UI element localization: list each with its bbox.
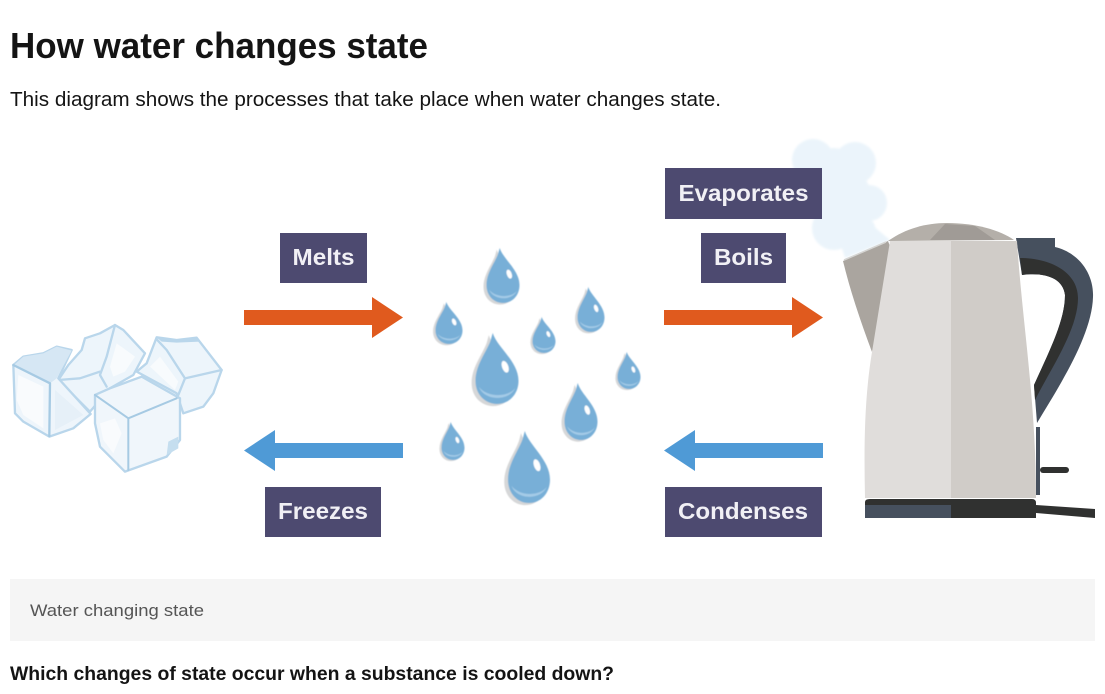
kettle switch bbox=[1036, 427, 1069, 495]
kettle spout bbox=[843, 241, 895, 352]
arrow: melts (orange, right) bbox=[244, 297, 403, 338]
kettle lid bbox=[888, 223, 1014, 241]
title: How water changes state bbox=[10, 25, 428, 66]
ice cube: front bbox=[95, 377, 180, 472]
kettle handle bbox=[1016, 238, 1093, 423]
arrow: freezes (blue, left) bbox=[244, 430, 403, 471]
label: Freezes bbox=[265, 487, 381, 537]
ice cube: left bbox=[13, 347, 91, 437]
kettle body bbox=[865, 241, 1036, 498]
arrow: condenses (blue, left) bbox=[664, 430, 823, 471]
label: Condenses bbox=[665, 487, 822, 537]
label: Condenses: Condenses bbox=[678, 498, 808, 524]
kettle base bbox=[865, 499, 1036, 518]
label: Evaporates bbox=[665, 168, 822, 219]
icon: kettle bbox=[843, 223, 1095, 518]
question text: Which changes of state occur when a substance is cooled down? bbox=[10, 664, 614, 685]
label: Melts bbox=[280, 233, 367, 283]
icon: steam bbox=[792, 139, 890, 258]
arrow: boils/evaporates (orange, right) bbox=[664, 297, 823, 338]
ice cube: back centre bbox=[58, 325, 145, 412]
icon: ice cubes bbox=[13, 325, 222, 472]
label: Melts: Melts bbox=[292, 244, 354, 270]
label: Evaporates: Evaporates bbox=[678, 180, 808, 206]
caption panel bbox=[10, 579, 1095, 641]
intro text: This diagram shows the processes that take place when water changes state. bbox=[10, 89, 721, 111]
label: Boils: Boils bbox=[714, 244, 773, 270]
caption panel: Water changing state bbox=[30, 601, 204, 620]
label: Freezes: Freezes bbox=[278, 498, 368, 524]
label: Boils bbox=[701, 233, 786, 283]
kettle cord bbox=[1036, 505, 1095, 518]
ice cube: back right bbox=[137, 337, 222, 413]
icon: water drops bbox=[433, 248, 640, 505]
